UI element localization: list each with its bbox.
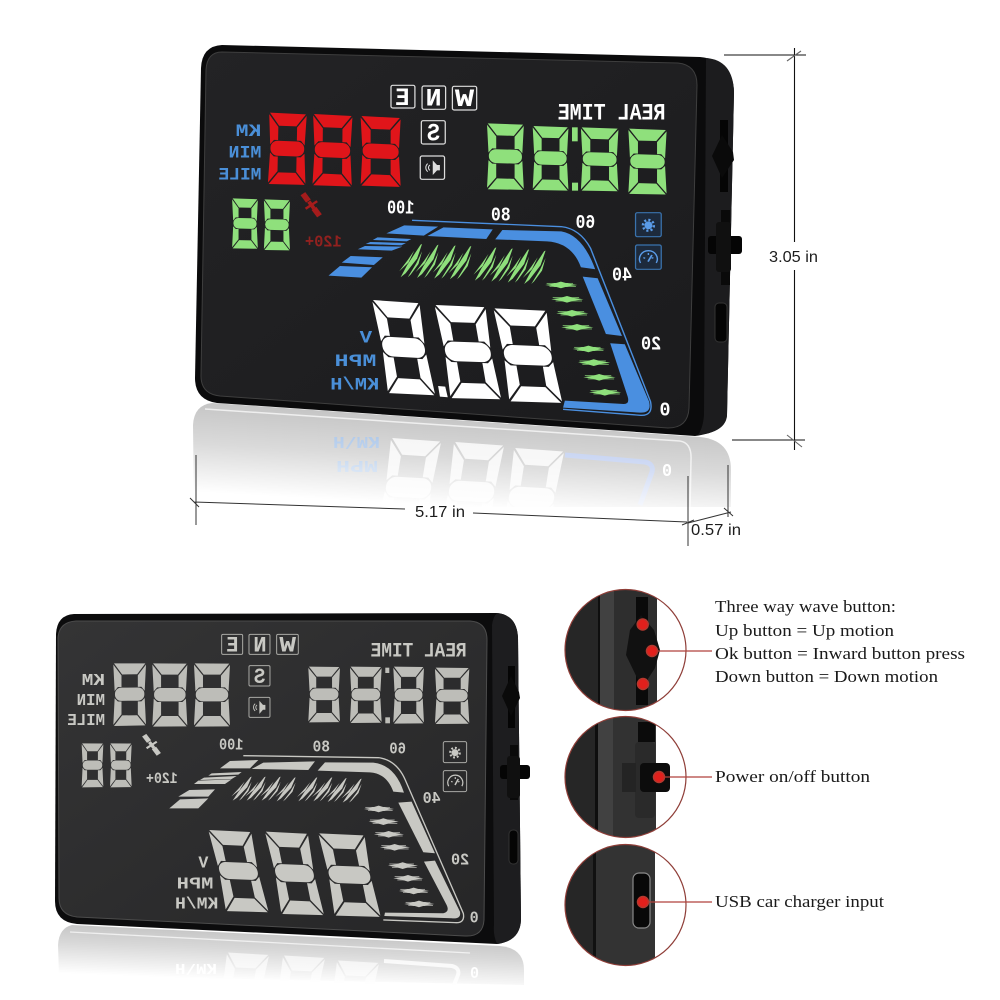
green small digits	[232, 198, 290, 251]
HUD display artwork: E	[395, 84, 410, 113]
reflection: bottom device: KM/H	[175, 959, 217, 976]
real time label: REAL TIME	[558, 101, 666, 127]
icon: satellite	[139, 732, 164, 758]
dimension: width 5.17 in: 5.17 in	[415, 504, 465, 521]
HUD display artwork	[67, 634, 479, 929]
unit labels: KM	[236, 121, 261, 142]
side controls	[708, 120, 742, 342]
white speed digits	[372, 300, 562, 403]
unit labels	[219, 121, 379, 395]
device: top colour HUD	[195, 45, 742, 436]
HUD display artwork: E	[226, 634, 238, 659]
HUD display artwork: S	[427, 119, 440, 148]
speed scale numbers: 80	[491, 205, 511, 227]
dimension: height 3.05 in: 3.05 in	[769, 249, 818, 266]
speed scale numbers: 40	[612, 265, 632, 287]
text block: wave button instructions	[715, 597, 965, 686]
speed scale numbers: 80	[313, 738, 330, 757]
speed digits	[208, 830, 381, 917]
reflection: bottom device	[58, 925, 524, 984]
device face	[58, 621, 487, 936]
callout circle: wave button	[565, 589, 712, 711]
trip digits	[113, 663, 230, 727]
speed scale numbers: 60	[389, 741, 406, 760]
device side	[698, 58, 734, 435]
unit labels	[67, 672, 218, 915]
icon: settings gear	[636, 213, 661, 237]
speed scale numbers: 20	[451, 852, 469, 871]
unit labels: MPH	[177, 876, 213, 895]
speed scale numbers: 0	[659, 400, 671, 422]
unit labels: V	[359, 327, 372, 348]
speed scale numbers: 100	[387, 198, 414, 220]
connector line	[659, 776, 712, 778]
unit labels: MILE	[67, 712, 105, 731]
reflection: top device: 0	[662, 458, 672, 478]
dimension: depth 0.57 in: 0.57 in	[691, 522, 741, 539]
unit labels: MPH	[335, 351, 376, 372]
callout circle: power button	[565, 716, 712, 838]
clock digits	[308, 667, 469, 724]
reflection: top device: KM/H	[333, 431, 380, 450]
unit labels: MILE	[219, 164, 261, 185]
connector line	[643, 901, 712, 903]
icon: speaker	[254, 701, 265, 714]
text block: wave button instructions: Ok button = Inward button press	[715, 644, 965, 663]
device face	[201, 52, 697, 428]
icon: settings gear	[443, 742, 467, 763]
text block: wave button instructions: Up button = Up motion	[715, 621, 894, 640]
connector line	[652, 650, 712, 652]
green diagonal bars	[399, 244, 546, 284]
HUD display artwork: S	[254, 665, 265, 690]
device side	[492, 613, 521, 944]
speed scale numbers: 40	[423, 790, 441, 809]
HUD display artwork	[219, 84, 671, 422]
icon: gauge	[636, 245, 661, 269]
text: power button: Power on/off button	[715, 767, 870, 786]
HUD display artwork: N	[426, 84, 442, 113]
speed arc	[169, 756, 464, 923]
small digits	[82, 743, 132, 787]
blue speed arc	[329, 220, 651, 415]
reflection: bottom device: 0	[470, 961, 479, 980]
reflection: top device: MPH	[336, 455, 378, 474]
text: USB input: USB car charger input	[715, 892, 884, 911]
speed scale numbers	[219, 737, 479, 929]
compass and sound indicators	[222, 634, 298, 717]
HUD display artwork: N	[253, 634, 267, 659]
text block: wave button instructions: Three way wave button:	[715, 597, 896, 616]
unit labels: KM	[82, 672, 105, 691]
device: bottom monochrome HUD	[55, 613, 530, 944]
text block: wave button instructions: Down button = Down motion	[715, 667, 938, 686]
speed scale numbers: 100	[219, 737, 243, 756]
icon: speaker	[426, 160, 440, 175]
unit labels: KM/H	[175, 896, 218, 915]
dimension: height 3.05 in	[724, 48, 818, 450]
unit labels: MIN	[229, 142, 261, 163]
red trip digits	[268, 113, 401, 187]
HUD display artwork: W	[455, 85, 474, 114]
green horizontal bars	[545, 282, 621, 396]
callout circle: USB port	[565, 844, 712, 967]
speed scale numbers: 0	[470, 910, 479, 929]
compass and sound indicators	[391, 85, 477, 179]
icon: gauge	[443, 771, 467, 792]
real time label: REAL TIME	[371, 640, 467, 663]
dimension: width 5.17 in	[190, 455, 694, 546]
speed scale numbers	[387, 198, 671, 422]
horizontal bars	[364, 806, 434, 907]
speed scale numbers: 20	[641, 334, 661, 356]
HUD display artwork: W	[278, 634, 296, 659]
icon: satellite	[297, 190, 325, 220]
overspeed label: 120+	[305, 234, 342, 252]
overspeed label: 120+	[146, 770, 178, 788]
reflection: top device	[193, 403, 731, 507]
unit labels: KM/H	[330, 374, 379, 395]
unit labels: V	[198, 855, 208, 874]
device body	[195, 45, 734, 436]
speed scale numbers: 60	[576, 213, 595, 235]
diagonal bars	[231, 777, 362, 803]
unit labels: MIN	[77, 692, 105, 711]
side controls	[500, 666, 530, 864]
green clock digits	[487, 123, 667, 195]
dimension: depth 0.57 in	[688, 465, 741, 539]
device body	[55, 613, 521, 944]
